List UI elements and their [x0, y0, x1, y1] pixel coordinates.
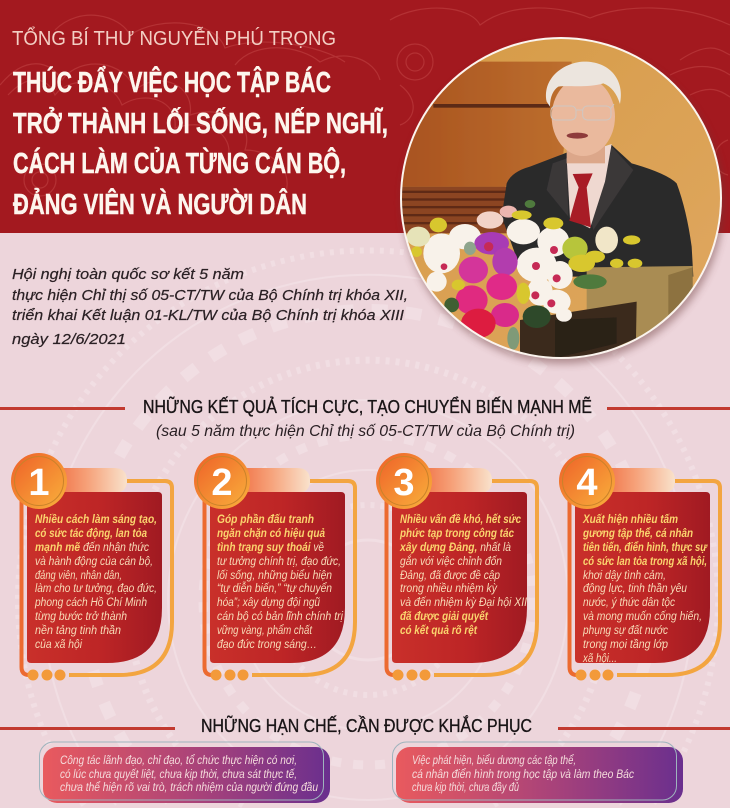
limitation box 2: cá nhân điển hình trong học tập và làm theo Bác	[412, 769, 634, 781]
card 3: xây dựng Đảng, nhất là	[399, 540, 511, 554]
section heading: positive results	[0, 396, 730, 440]
section heading: positive results: (sau 5 năm thực hiện Chỉ thị số 05-CT/TW của Bộ Chính trị)	[156, 423, 575, 440]
limitation box 1	[40, 742, 330, 803]
card 2: ngăn chặn có hiệu quả	[217, 526, 325, 540]
card 3: Đảng, đã được đề cập	[400, 568, 500, 582]
card 3: Nhiều vấn đề khó, hết sức	[400, 512, 521, 526]
card 3: gắn với việc chỉnh đốn	[400, 553, 502, 568]
card 2: tình trạng suy thoái về	[217, 540, 324, 554]
card 3	[376, 453, 537, 680]
limitation box 1: chưa thể hiện rõ vai trò, trách nhiệm của người đứng đầu	[60, 782, 319, 794]
card 1: và hành động của cán bộ,	[35, 554, 153, 568]
limitation box 2: chưa kịp thời, chưa đầy đủ	[412, 782, 519, 794]
card 2: vững vàng, phẩm chất	[217, 623, 312, 637]
section heading: limitations	[0, 715, 730, 736]
card 4: phụng sự đất nước	[582, 623, 669, 637]
event description: ngày 12/6/2021	[12, 332, 126, 348]
card 4: khơi dậy tình cảm,	[583, 568, 666, 582]
title: THÚC ĐẨY VIỆC HỌC TẬP BÁC	[13, 67, 331, 99]
photo: speaker at podium with flowers	[390, 30, 730, 370]
title: TRỞ THÀNH LỐI SỐNG, NẾP NGHĨ,	[13, 107, 388, 140]
card 4	[559, 453, 720, 680]
card 4: động lực, tinh thần yêu	[583, 581, 687, 595]
card 2: tư tưởng chính trị, đạo đức,	[217, 554, 341, 568]
card 2: 2	[211, 462, 233, 504]
header: red band	[0, 0, 730, 233]
subtitle: speaker: TỔNG BÍ THƯ NGUYỄN PHÚ TRỌNG	[12, 26, 336, 50]
limitation box 2	[392, 742, 683, 803]
card 3: có kết quả rõ rệt	[400, 623, 478, 637]
card 2: cán bộ có bản lĩnh chính trị	[217, 609, 344, 623]
card 3: phức tạp trong công tác	[399, 526, 514, 540]
section heading: limitations: NHỮNG HẠN CHẾ, CẦN ĐƯỢC KHẮC PHỤC	[201, 715, 532, 736]
card 3: đã được giải quyết	[400, 609, 489, 623]
title: CÁCH LÀM CỦA TỪNG CÁN BỘ,	[13, 147, 346, 180]
event description: thực hiện Chỉ thị số 05-CT/TW của Bộ Chính trị khóa XII,	[12, 288, 408, 304]
card 1	[11, 453, 172, 680]
title	[13, 67, 388, 221]
card 1: đảng viên, nhân dân,	[35, 568, 122, 582]
card 2: lối sống, những biểu hiện	[217, 568, 332, 582]
card 1: phong cách Hồ Chí Minh	[34, 595, 147, 609]
limitation box 2: Việc phát hiện, biểu dương các tập thể,	[412, 755, 576, 767]
card 1: Nhiều cách làm sáng tạo,	[35, 512, 157, 526]
limitation box 1: có lúc chưa quyết liệt, chưa kịp thời, chưa sát thực tế,	[60, 769, 297, 781]
card 1: mạnh mẽ đến nhận thức	[35, 540, 150, 554]
card 3: 3	[393, 462, 415, 504]
event description: triển khai Kết luận 01-KL/TW của Bộ Chính trị khóa XIII	[12, 308, 404, 324]
card 4: Xuất hiện nhiều tấm	[582, 512, 678, 526]
card 2: hóa”; xây dựng đội ngũ	[217, 595, 320, 609]
card 1: nền tảng tinh thần	[35, 623, 121, 637]
section heading: positive results: NHỮNG KẾT QUẢ TÍCH CỰC, TẠO CHUYỂN BIẾN MẠNH MẼ	[143, 396, 592, 417]
limitation box 1: Công tác lãnh đạo, chỉ đạo, tổ chức thực hiện có nơi,	[60, 755, 297, 767]
card 2	[194, 453, 355, 680]
card 4: gương tập thể, cá nhân	[582, 526, 693, 540]
card 2: đạo đức trong sáng…	[217, 637, 317, 651]
card 1: có sức tác động, lan tỏa	[35, 526, 147, 540]
background: drum mandala pattern	[18, 250, 718, 805]
card 1: 1	[28, 462, 50, 504]
card 4: và mong muốn cống hiến,	[583, 609, 702, 623]
card 1: từng bước trở thành	[35, 609, 127, 623]
card 2: “tự diễn biến,” “tự chuyển	[217, 580, 332, 595]
card 3: và đến nhiệm kỳ Đại hội XII	[400, 595, 527, 609]
card 2: Góp phần đấu tranh	[217, 512, 314, 526]
card 1: của xã hội	[35, 637, 83, 651]
event description	[12, 267, 408, 348]
card 4: nước, ý thức dân tộc	[583, 595, 676, 609]
card 4: trong mọi tầng lớp	[583, 637, 668, 651]
card 1: làm cho tư tưởng, đạo đức,	[35, 581, 157, 595]
event description: Hội nghị toàn quốc sơ kết 5 năm	[12, 267, 244, 283]
card 4: xã hội...	[582, 651, 617, 665]
card 4: 4	[576, 462, 598, 504]
card 3: trong nhiều nhiệm kỳ	[400, 581, 498, 595]
title: ĐẢNG VIÊN VÀ NGƯỜI DÂN	[13, 188, 307, 221]
